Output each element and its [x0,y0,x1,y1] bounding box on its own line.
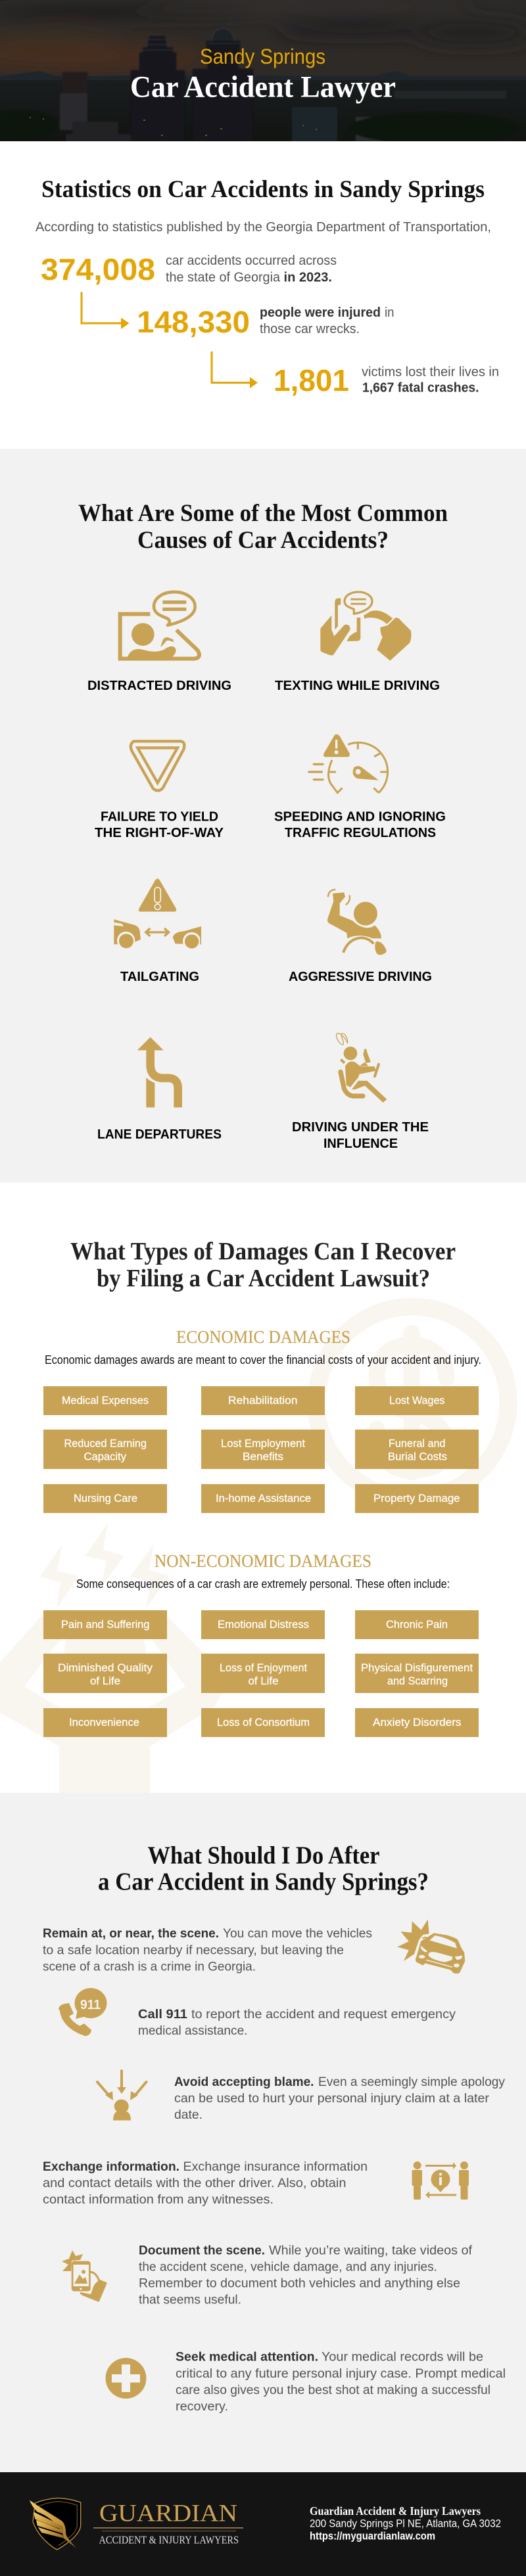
heading: damages: by Filing a Car Accident Lawsuit? [97,1265,430,1292]
box: diminished quality of life: Diminished Quality [58,1661,153,1674]
title line: Car Accident Lawyer: Car Accident Lawyer [130,70,396,104]
box: loss of enjoyment of life: of Life [249,1675,279,1687]
label: lane departures: LANE DEPARTURES [97,1127,222,1142]
heading: common causes [78,500,448,554]
box: loss of enjoyment of life [201,1654,325,1693]
label: tailgating: TAILGATING [120,970,199,984]
icon: two people exchanging information [412,2161,469,2200]
step text: seek medical attention: Seek medical attention. [176,2349,318,2364]
box: anxiety disorders [355,1708,479,1737]
step text: avoid accepting blame: Even a seemingly simple apology [318,2075,505,2089]
text: non-economic damages intro: Some consequences of a car crash are extremely personal. These often include: [76,1577,450,1591]
icon: driving under the influence [337,1033,387,1102]
contact details: 200 Sandy Springs Pl NE, Atlanta, GA 3032 [310,2518,501,2529]
stat: fatalities: 1,801 [274,363,349,397]
icon: yield sign [131,741,184,790]
stat: injured: people were injured [260,305,381,320]
icon: phone 911: 911 [80,1998,101,2012]
step text: remain at the scene: to a safe location nearby if necessary, but leaving the [43,1943,344,1958]
watermark: dollar sign in circle [316,1307,508,1499]
icon: lane departure arrow [137,1037,178,1108]
box: loss of consortium [201,1708,325,1737]
icon: aggressive driving [327,890,387,955]
icon: phone 911 [59,1988,107,2036]
stat: injured: 148,330 [137,305,250,339]
logo: wordmark [93,2500,243,2546]
label: failure to yield [95,809,224,840]
label: speeding: TRAFFIC REGULATIONS [285,826,436,840]
step text: call 911: Call 911 [138,2007,187,2022]
heading: damages: What Types of Damages Can I Recover [70,1238,456,1265]
box: property damage: Property Damage [373,1492,460,1504]
step text: seek medical attention: care also gives you the best shot at making a successful [176,2383,490,2397]
step text: remain at the scene: You can move the vehicles [223,1926,372,1941]
label: driving under the influence: DRIVING UNDER THE [292,1120,429,1135]
heading: what to do: a Car Accident in Sandy Springs? [98,1868,429,1896]
stat: car accidents: in 2023. [284,271,332,285]
box: reduced earning capacity: Reduced Earning [64,1437,147,1449]
box: funeral and burial costs [355,1430,479,1469]
box: inconvenience: Inconvenience [69,1716,139,1729]
title line: Sandy Springs: Sandy Springs [200,45,325,68]
box: nursing care: Nursing Care [74,1492,137,1504]
arrow: injuries to fatalities [212,351,258,388]
step text: document the scene: Remember to document both vehicles and anything else [139,2276,460,2290]
box: loss of enjoyment of life: Loss of Enjoyment [220,1661,307,1674]
step text: document the scene [139,2243,473,2307]
label: driving under the influence [292,1120,429,1151]
box: funeral and burial costs: Burial Costs [388,1451,447,1462]
box: physical disfigurement and scarring [355,1654,479,1693]
stat: car accidents [41,252,337,286]
step text: exchange information: Exchange insurance information [183,2159,368,2174]
box: pain and suffering: Pain and Suffering [61,1618,150,1631]
box: inconvenience [43,1708,167,1737]
step text: avoid accepting blame: date. [174,2108,203,2122]
icon: tailgating cars [112,878,201,950]
label: texting while driving: TEXTING WHILE DRIVING [275,679,440,693]
box: lost wages [355,1386,479,1415]
intro text: According to statistics published by the Georgia Department of Transportation, [36,219,491,235]
label: speeding [274,809,446,840]
box: nursing care [43,1484,167,1513]
box: reduced earning capacity [43,1430,167,1469]
step text: document the scene: that seems useful. [139,2293,241,2307]
panel: what to do after an accident [0,1793,526,2472]
stat: car accidents: car accidents occurred across [166,254,337,268]
subheading: economic damages: ECONOMIC DAMAGES [176,1327,350,1347]
stat: fatalities [274,363,499,397]
icon: texting while driving [320,592,412,661]
label: failure to yield: FAILURE TO YIELD [101,809,218,824]
panel: footer [0,2472,526,2576]
step text: call 911: medical assistance. [138,2023,247,2038]
heading: statistics: Statistics on Car Accidents in Sandy Springs [41,176,485,203]
stat: injured: those car wrecks. [260,322,360,336]
text: economic damages intro: Economic damages awards are meant to cover the financial costs of your accident and injury. [45,1353,481,1367]
step text: exchange information: Exchange information. [43,2159,179,2174]
box: lost employment benefits: Lost Employment [221,1437,305,1449]
heading: common causes: What Are Some of the Most Common [78,500,448,527]
step text: avoid accepting blame: can be used to hurt your personal injury claim at a later [174,2091,489,2106]
header title [130,45,396,104]
arrow: accidents to injuries [82,292,129,329]
box: lost employment benefits: Benefits [243,1451,283,1462]
contact details [310,2504,501,2542]
label: failure to yield: THE RIGHT-OF-WAY [95,826,224,840]
step text: seek medical attention: Your medical records will be [322,2349,483,2364]
logo: wordmark: ACCIDENT & INJURY LAWYERS [99,2533,239,2546]
stat: car accidents: 374,008 [41,252,155,286]
watermark: person in pain with lightning [0,1523,222,1793]
label: aggressive driving: AGGRESSIVE DRIVING [289,970,432,984]
panel: damages [43,1238,481,1737]
icon: phone documenting scene [62,2250,107,2302]
box: lost wages: Lost Wages [389,1394,444,1407]
box: anxiety disorders: Anxiety Disorders [373,1716,462,1729]
step text: seek medical attention: recovery. [176,2399,228,2414]
subheading: non-economic damages: NON-ECONOMIC DAMAGES [155,1551,371,1571]
box: property damage [355,1484,479,1513]
box: diminished quality of life [43,1654,167,1693]
box: in-home assistance: In-home Assistance [216,1492,311,1504]
step text: exchange information: and contact details with the other driver. Also, obtain [43,2176,346,2190]
box: physical disfigurement and scarring: Physical Disfigurement [361,1661,473,1674]
stat: injured [137,305,394,339]
stat: fatalities: victims lost their lives in [362,365,499,380]
step text: document the scene: the accident scene, vehicle damage, and any injuries. [139,2260,437,2274]
box: rehabilitation [201,1386,325,1415]
heading: what to do [98,1842,429,1896]
box: reduced earning capacity: Capacity [84,1451,126,1462]
label: driving under the influence: INFLUENCE [323,1137,398,1151]
step text: exchange information [43,2159,368,2207]
box: chronic pain: Chronic Pain [386,1618,448,1631]
heading: common causes: Causes of Car Accidents? [137,527,389,554]
step text: remain at the scene [43,1926,372,1974]
logo: wordmark: GUARDIAN [99,2500,237,2527]
step text: avoid accepting blame [174,2075,505,2122]
icon: distracted driving [120,592,199,659]
box: chronic pain [355,1610,479,1639]
box: lost employment benefits [201,1430,325,1469]
box: medical expenses: Medical Expenses [62,1394,149,1407]
header panel: skyline photo [0,0,526,144]
step text: seek medical attention [176,2349,506,2414]
step text: document the scene: Document the scene. [139,2243,265,2257]
step text: seek medical attention: critical to any future personal injury case. Prompt medical [176,2366,506,2381]
panel: common causes [0,449,526,1183]
contact details: https://myguardianlaw.com [310,2529,435,2542]
panel: statistics [36,176,499,397]
label: distracted driving: DISTRACTED DRIVING [87,679,231,693]
box: physical disfigurement and scarring: and Scarring [387,1675,448,1687]
box: pain and suffering [43,1610,167,1639]
box: loss of consortium: Loss of Consortium [217,1716,310,1729]
box: rehabilitation: Rehabilitation [228,1394,297,1407]
stat: fatalities: 1,667 fatal crashes. [362,381,479,395]
step text: remain at the scene: Remain at, or near, the scene. [43,1926,219,1941]
heading: what to do: What Should I Do After [147,1842,380,1870]
step text: call 911 [138,2007,456,2038]
icon: speedometer warning [309,734,388,793]
box: in-home assistance [201,1484,325,1513]
step text: avoid accepting blame: Avoid accepting blame. [174,2075,314,2089]
box: medical expenses [43,1386,167,1415]
box: diminished quality of life: of Life [90,1675,120,1687]
contact details: Guardian Accident & Injury Lawyers [310,2504,481,2518]
box: funeral and burial costs: Funeral and [389,1437,446,1449]
icon: medical cross [105,2358,146,2399]
icon: arrows pointing at person [97,2071,146,2121]
step text: call 911: to report the accident and request emergency [191,2007,456,2022]
label: speeding: SPEEDING AND IGNORING [274,809,446,824]
box: emotional distress: Emotional Distress [218,1618,309,1631]
step text: exchange information: contact information from any witnesses. [43,2192,274,2207]
step text: document the scene: While you’re waiting, take videos of [269,2243,473,2257]
stat: car accidents: the state of Georgia [166,271,281,285]
icon: crashed car [397,1920,465,1974]
box: emotional distress [201,1610,325,1639]
stat: injured: in [385,305,394,320]
step text: remain at the scene: scene of a crash is a crime in Georgia. [43,1959,256,1974]
heading: damages [70,1238,456,1292]
logo: shield and wing [30,2498,81,2550]
